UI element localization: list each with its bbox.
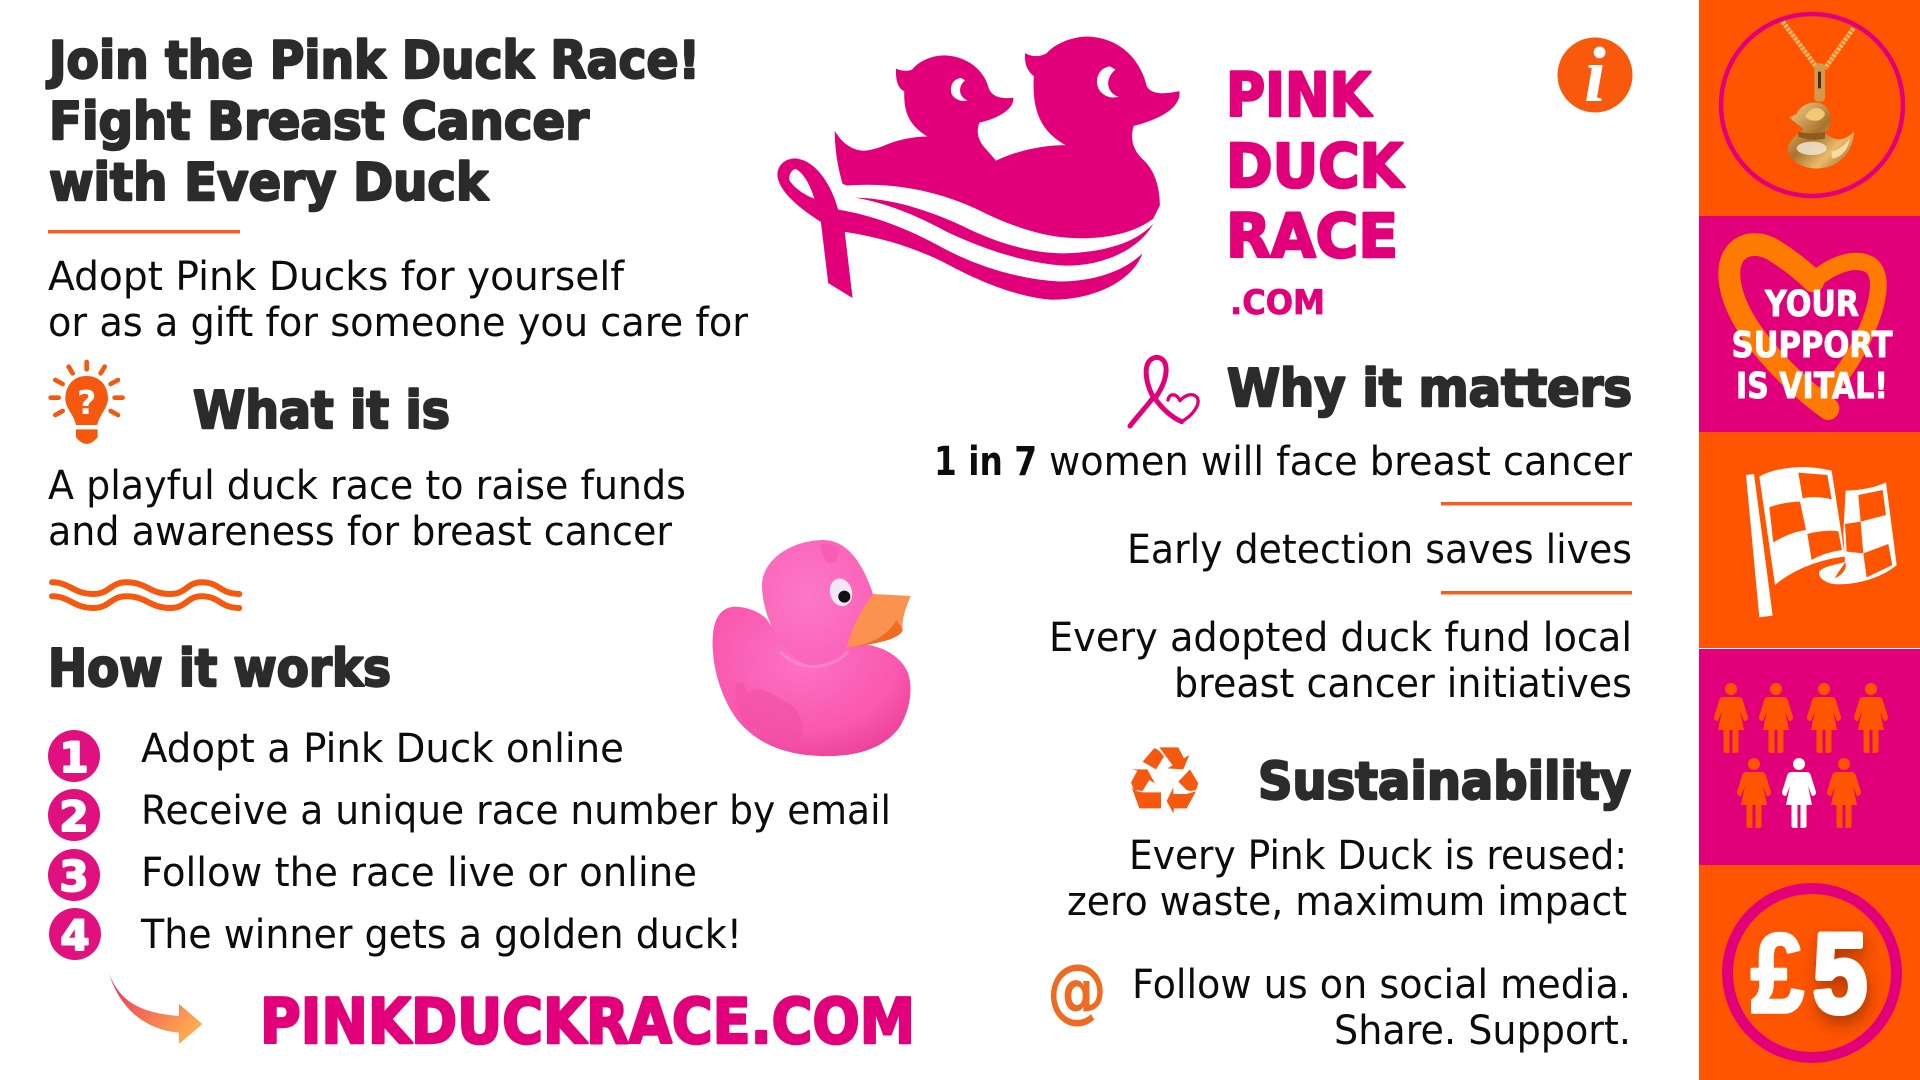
sidebar (1699, 0, 1920, 1080)
intro text: or as a gift for someone you care for (48, 300, 749, 346)
icon: lightbulb: ? (77, 383, 96, 422)
social text (1132, 962, 1631, 1054)
heading: why it matters: Why it matters (1227, 359, 1632, 419)
sustainability text (1067, 833, 1627, 925)
panel: 1 in 7 women (1699, 649, 1920, 865)
what it is text: A playful duck race to raise funds (48, 463, 686, 509)
icon: recycle (1131, 747, 1198, 813)
panel: your support is vital: IS VITAL! (1736, 366, 1888, 407)
statement: local initiatives: breast cancer initiatives (1174, 661, 1632, 707)
panel: five pounds: £ (1751, 911, 1804, 1036)
title (46, 31, 700, 213)
logo wordmark: PINK (1226, 60, 1373, 131)
wavy divider (52, 582, 239, 608)
panel: your support is vital: YOUR (1764, 284, 1859, 325)
heading: how it works: How it works (48, 639, 391, 699)
heading: sustainability: Sustainability (1258, 752, 1631, 812)
website link: PINKDUCKRACE.COM (260, 985, 915, 1058)
step 1: Adopt a Pink Duck online (141, 726, 624, 772)
arrow (109, 973, 202, 1044)
icon: ribbon with heart (1130, 357, 1198, 426)
logo wordmark (1226, 60, 1406, 323)
intro text: Adopt Pink Ducks for yourself (48, 254, 625, 300)
panel: your support is vital (1699, 216, 1920, 432)
logo wordmark: .COM (1230, 283, 1325, 323)
statement: early detection: Early detection saves lives (1127, 527, 1632, 573)
panel: your support is vital: SUPPORT (1732, 325, 1893, 366)
title: Join the Pink Duck Race! (46, 31, 700, 91)
step 1 (48, 726, 624, 782)
intro text (48, 254, 749, 346)
steps list (48, 726, 891, 960)
title: with Every Duck (49, 153, 489, 213)
logo: pink duck race (777, 37, 1406, 323)
step 4: The winner gets a golden duck! (140, 912, 742, 958)
icon: info: i (1584, 31, 1606, 118)
icon: lightbulb (51, 362, 123, 444)
heading: what it is: What it is (193, 381, 450, 441)
statement: local initiatives (1049, 615, 1632, 707)
step 4: 4 (60, 911, 90, 960)
step 2: 2 (59, 792, 89, 841)
what it is text (48, 463, 686, 555)
icon: at sign: @ (1047, 949, 1107, 1031)
step 2: Receive a unique race number by email (141, 788, 891, 834)
panel: golden duck necklace (1699, 0, 1920, 216)
social text: Follow us on social media. (1132, 962, 1631, 1008)
statement: 1 in 7: women will face breast cancer (1049, 439, 1633, 485)
sustainability text: Every Pink Duck is reused: (1129, 833, 1627, 879)
panel: five pounds (1699, 865, 1920, 1080)
statement: 1 in 7: 1 in 7 (934, 439, 1037, 485)
what it is text: and awareness for breast cancer (48, 509, 673, 555)
why it matters statements (934, 439, 1633, 707)
logo wordmark: DUCK (1226, 131, 1406, 202)
logo wordmark: RACE (1226, 201, 1398, 272)
title: Fight Breast Cancer (49, 92, 589, 152)
social text: Share. Support. (1334, 1008, 1631, 1054)
step 3: Follow the race live or online (141, 850, 697, 896)
panel: checkered flag (1699, 432, 1920, 648)
icon: info (1558, 31, 1632, 118)
step 3: 3 (59, 852, 89, 901)
logo mark: ducks and ribbon (777, 37, 1180, 300)
rubber duck (713, 540, 911, 756)
panel: five pounds: 5 (1813, 911, 1867, 1036)
statement: local initiatives: Every adopted duck fund local (1049, 615, 1632, 661)
step 1: 1 (59, 733, 89, 782)
sustainability text: zero waste, maximum impact (1067, 879, 1627, 925)
